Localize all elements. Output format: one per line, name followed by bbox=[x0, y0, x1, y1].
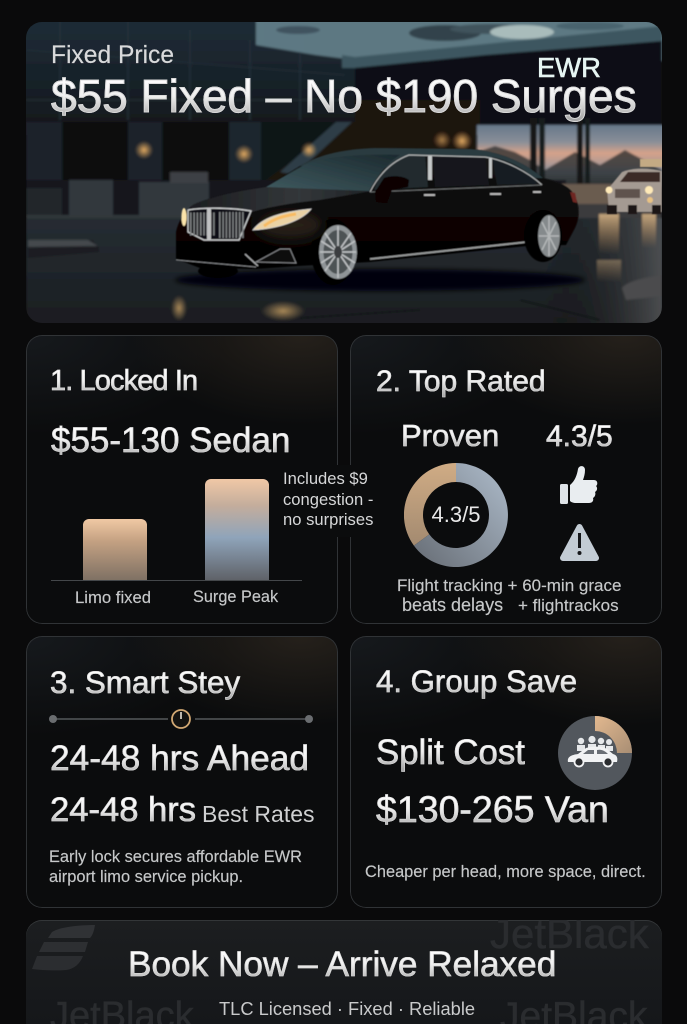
bar: surge peak bbox=[205, 479, 269, 580]
limousine bbox=[175, 148, 585, 291]
heading: Top Rated: 2. Top Rated bbox=[376, 365, 546, 398]
panel: 2. Top Rated bbox=[350, 335, 662, 624]
hero eyebrow: Fixed Price: Fixed Price bbox=[51, 42, 174, 69]
callout: congestion included: no surprises bbox=[283, 510, 373, 529]
heading: Locked In: 1. Locked In bbox=[50, 365, 197, 397]
label: best rates: Best Rates bbox=[202, 801, 314, 827]
hero illustration: limo at airport terminal bbox=[26, 22, 662, 323]
body text: Cheaper per head, more space, direct. bbox=[365, 863, 646, 881]
donut chart: rating: 4.3/5 bbox=[432, 502, 480, 527]
callout: congestion included: congestion - bbox=[283, 490, 373, 509]
body text line 1: Early lock secures affordable EWR bbox=[49, 848, 302, 866]
label: Proven: Proven bbox=[401, 418, 499, 453]
heading: Group Save: 4. Group Save bbox=[376, 664, 577, 699]
CTA heading: Book Now – Arrive Relaxed bbox=[128, 945, 556, 984]
panel: call to action footer bbox=[26, 920, 662, 1024]
icon: thumbs up bbox=[560, 466, 598, 504]
panel: 4. Group Save bbox=[350, 636, 662, 908]
callout: congestion included bbox=[278, 465, 380, 537]
caption line 2 right: + flightrackos bbox=[518, 596, 619, 615]
pie with group car icon bbox=[558, 716, 632, 790]
price: van range: $130-265 Van bbox=[376, 788, 609, 830]
price: sedan range: $55-130 Sedan bbox=[51, 421, 290, 460]
donut chart: rating bbox=[404, 463, 508, 567]
icon: warning triangle bbox=[560, 524, 599, 561]
timeline with clock icon bbox=[49, 709, 313, 729]
watermark logo bbox=[32, 925, 95, 970]
bar: limo fixed bbox=[83, 519, 147, 580]
terminal background bbox=[20, 16, 670, 326]
hero headline: $55 Fixed – No $190 Surges bbox=[51, 70, 637, 122]
heading: Smart Stey: 3. Smart Stey bbox=[50, 665, 240, 700]
label: split cost: Split Cost bbox=[376, 733, 525, 772]
airport sign: EWR: EWR bbox=[537, 52, 601, 83]
panel: hero photo banner bbox=[26, 22, 662, 323]
label: surge peak: Surge Peak bbox=[193, 588, 278, 606]
callout: congestion included: Includes $9 bbox=[283, 469, 368, 488]
stat: 24-48 hrs: 24-48 hrs bbox=[50, 791, 196, 829]
caption line 2 left: beats delays bbox=[402, 595, 503, 615]
CTA subtext: TLC Licensed · Fixed · Reliable bbox=[219, 998, 475, 1019]
label: limo fixed: Limo fixed bbox=[75, 588, 151, 607]
body text line 2: airport limo service pickup. bbox=[49, 868, 243, 886]
background car bbox=[606, 159, 662, 214]
panel: 1. Locked In bbox=[26, 335, 338, 624]
caption line 1: Flight tracking + 60-min grace bbox=[397, 576, 621, 595]
panel: 3. Smart Stay bbox=[26, 636, 338, 908]
rating: 4.3/5: 4.3/5 bbox=[546, 420, 613, 453]
stat: 24-48 hrs ahead: 24-48 hrs Ahead bbox=[50, 739, 309, 778]
